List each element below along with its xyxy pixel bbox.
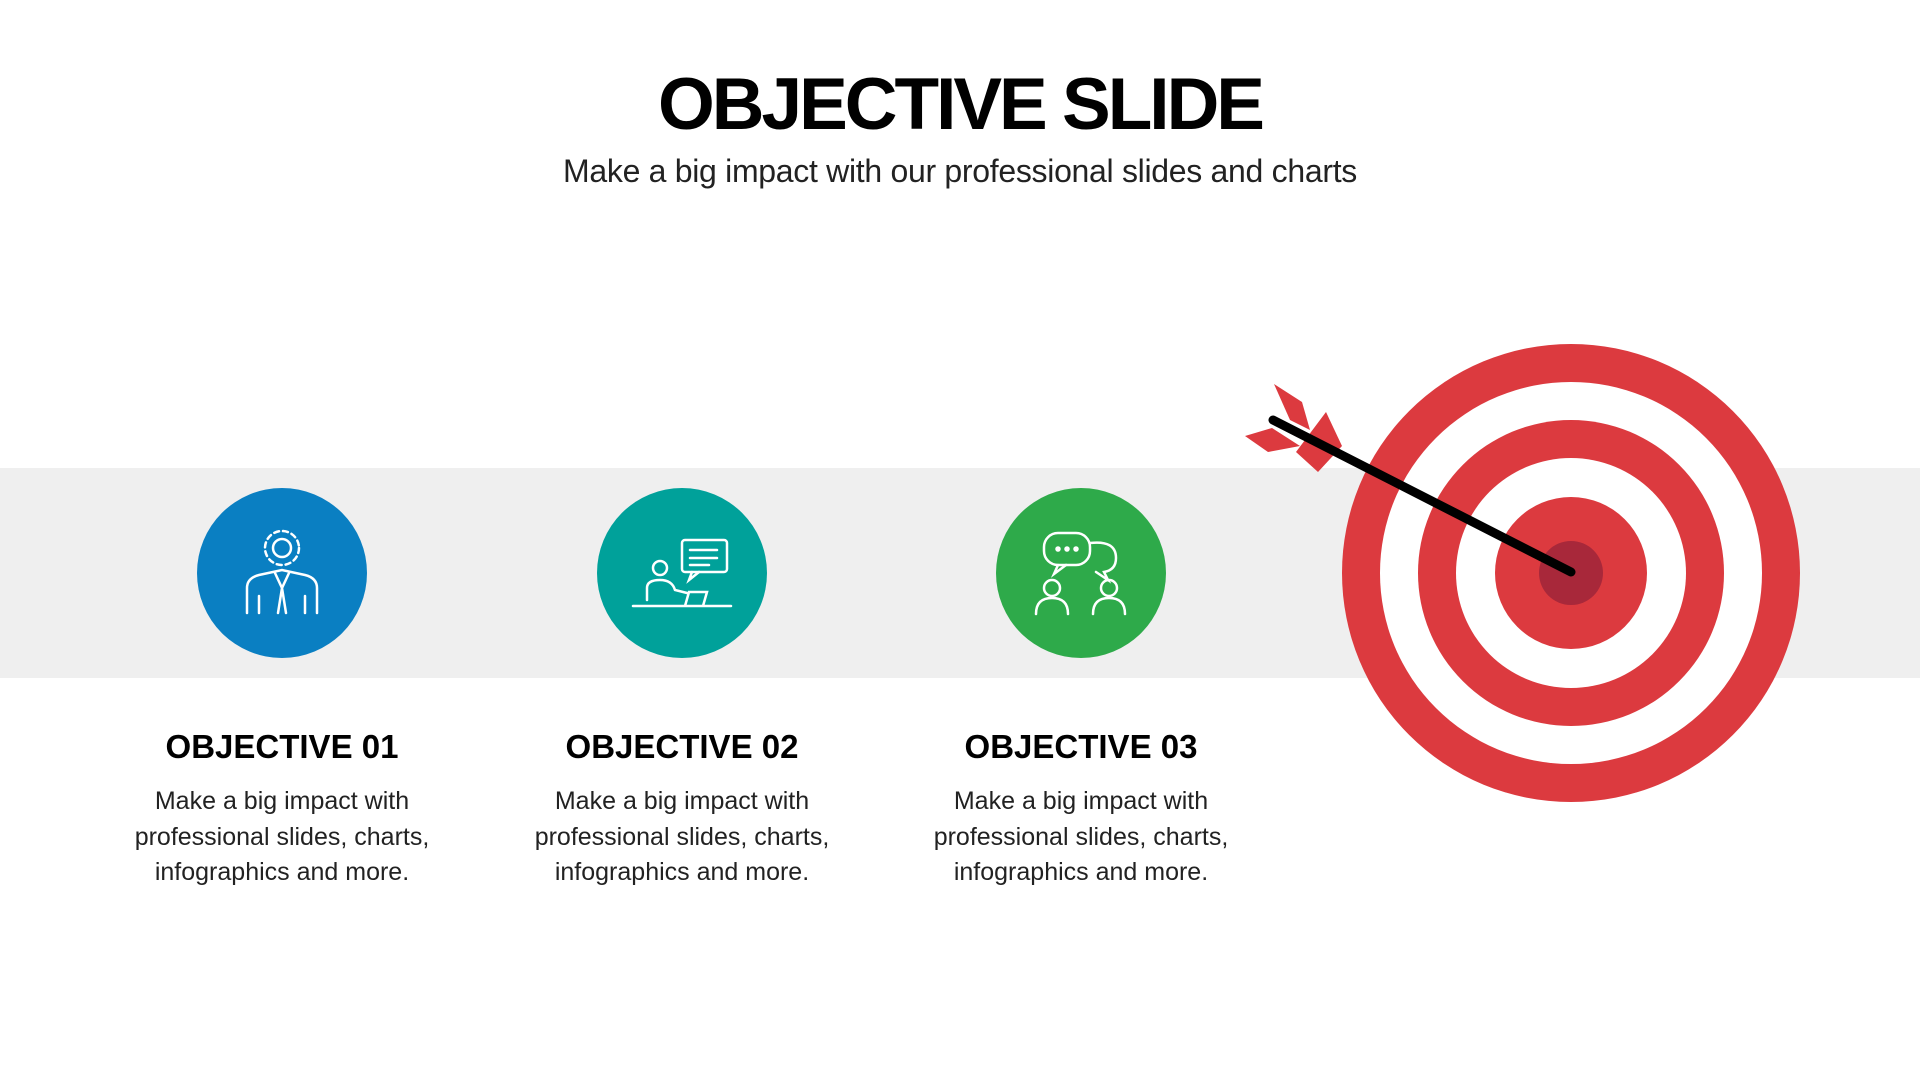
objective 03 text: infographics and more. <box>954 858 1208 886</box>
objective 01 text: professional slides, charts, <box>135 822 429 850</box>
objective 02 text: professional slides, charts, <box>535 822 829 850</box>
objective 03 text <box>934 728 1228 886</box>
objective 01 text <box>135 728 429 886</box>
objective 03 text: professional slides, charts, <box>934 822 1228 850</box>
objective 02 text: OBJECTIVE 02 <box>566 728 798 765</box>
icon: person at desk <box>597 488 767 658</box>
icon: people with speech bubbles <box>996 488 1166 658</box>
objective 03 text: Make a big impact with <box>954 787 1208 815</box>
objective 02 text: infographics and more. <box>555 858 809 886</box>
objective 02 text <box>535 728 829 886</box>
objective 02 text: Make a big impact with <box>555 787 809 815</box>
objective 01 text: infographics and more. <box>155 858 409 886</box>
objective 01 text: OBJECTIVE 01 <box>166 728 398 765</box>
objective 01 text: Make a big impact with <box>155 787 409 815</box>
subtitle: Make a big impact with our professional slides and charts <box>563 153 1357 189</box>
title: OBJECTIVE SLIDE <box>658 64 1262 145</box>
objective 03 text: OBJECTIVE 03 <box>965 728 1197 765</box>
gray band <box>0 468 1920 678</box>
icon: person with gear <box>197 488 367 658</box>
